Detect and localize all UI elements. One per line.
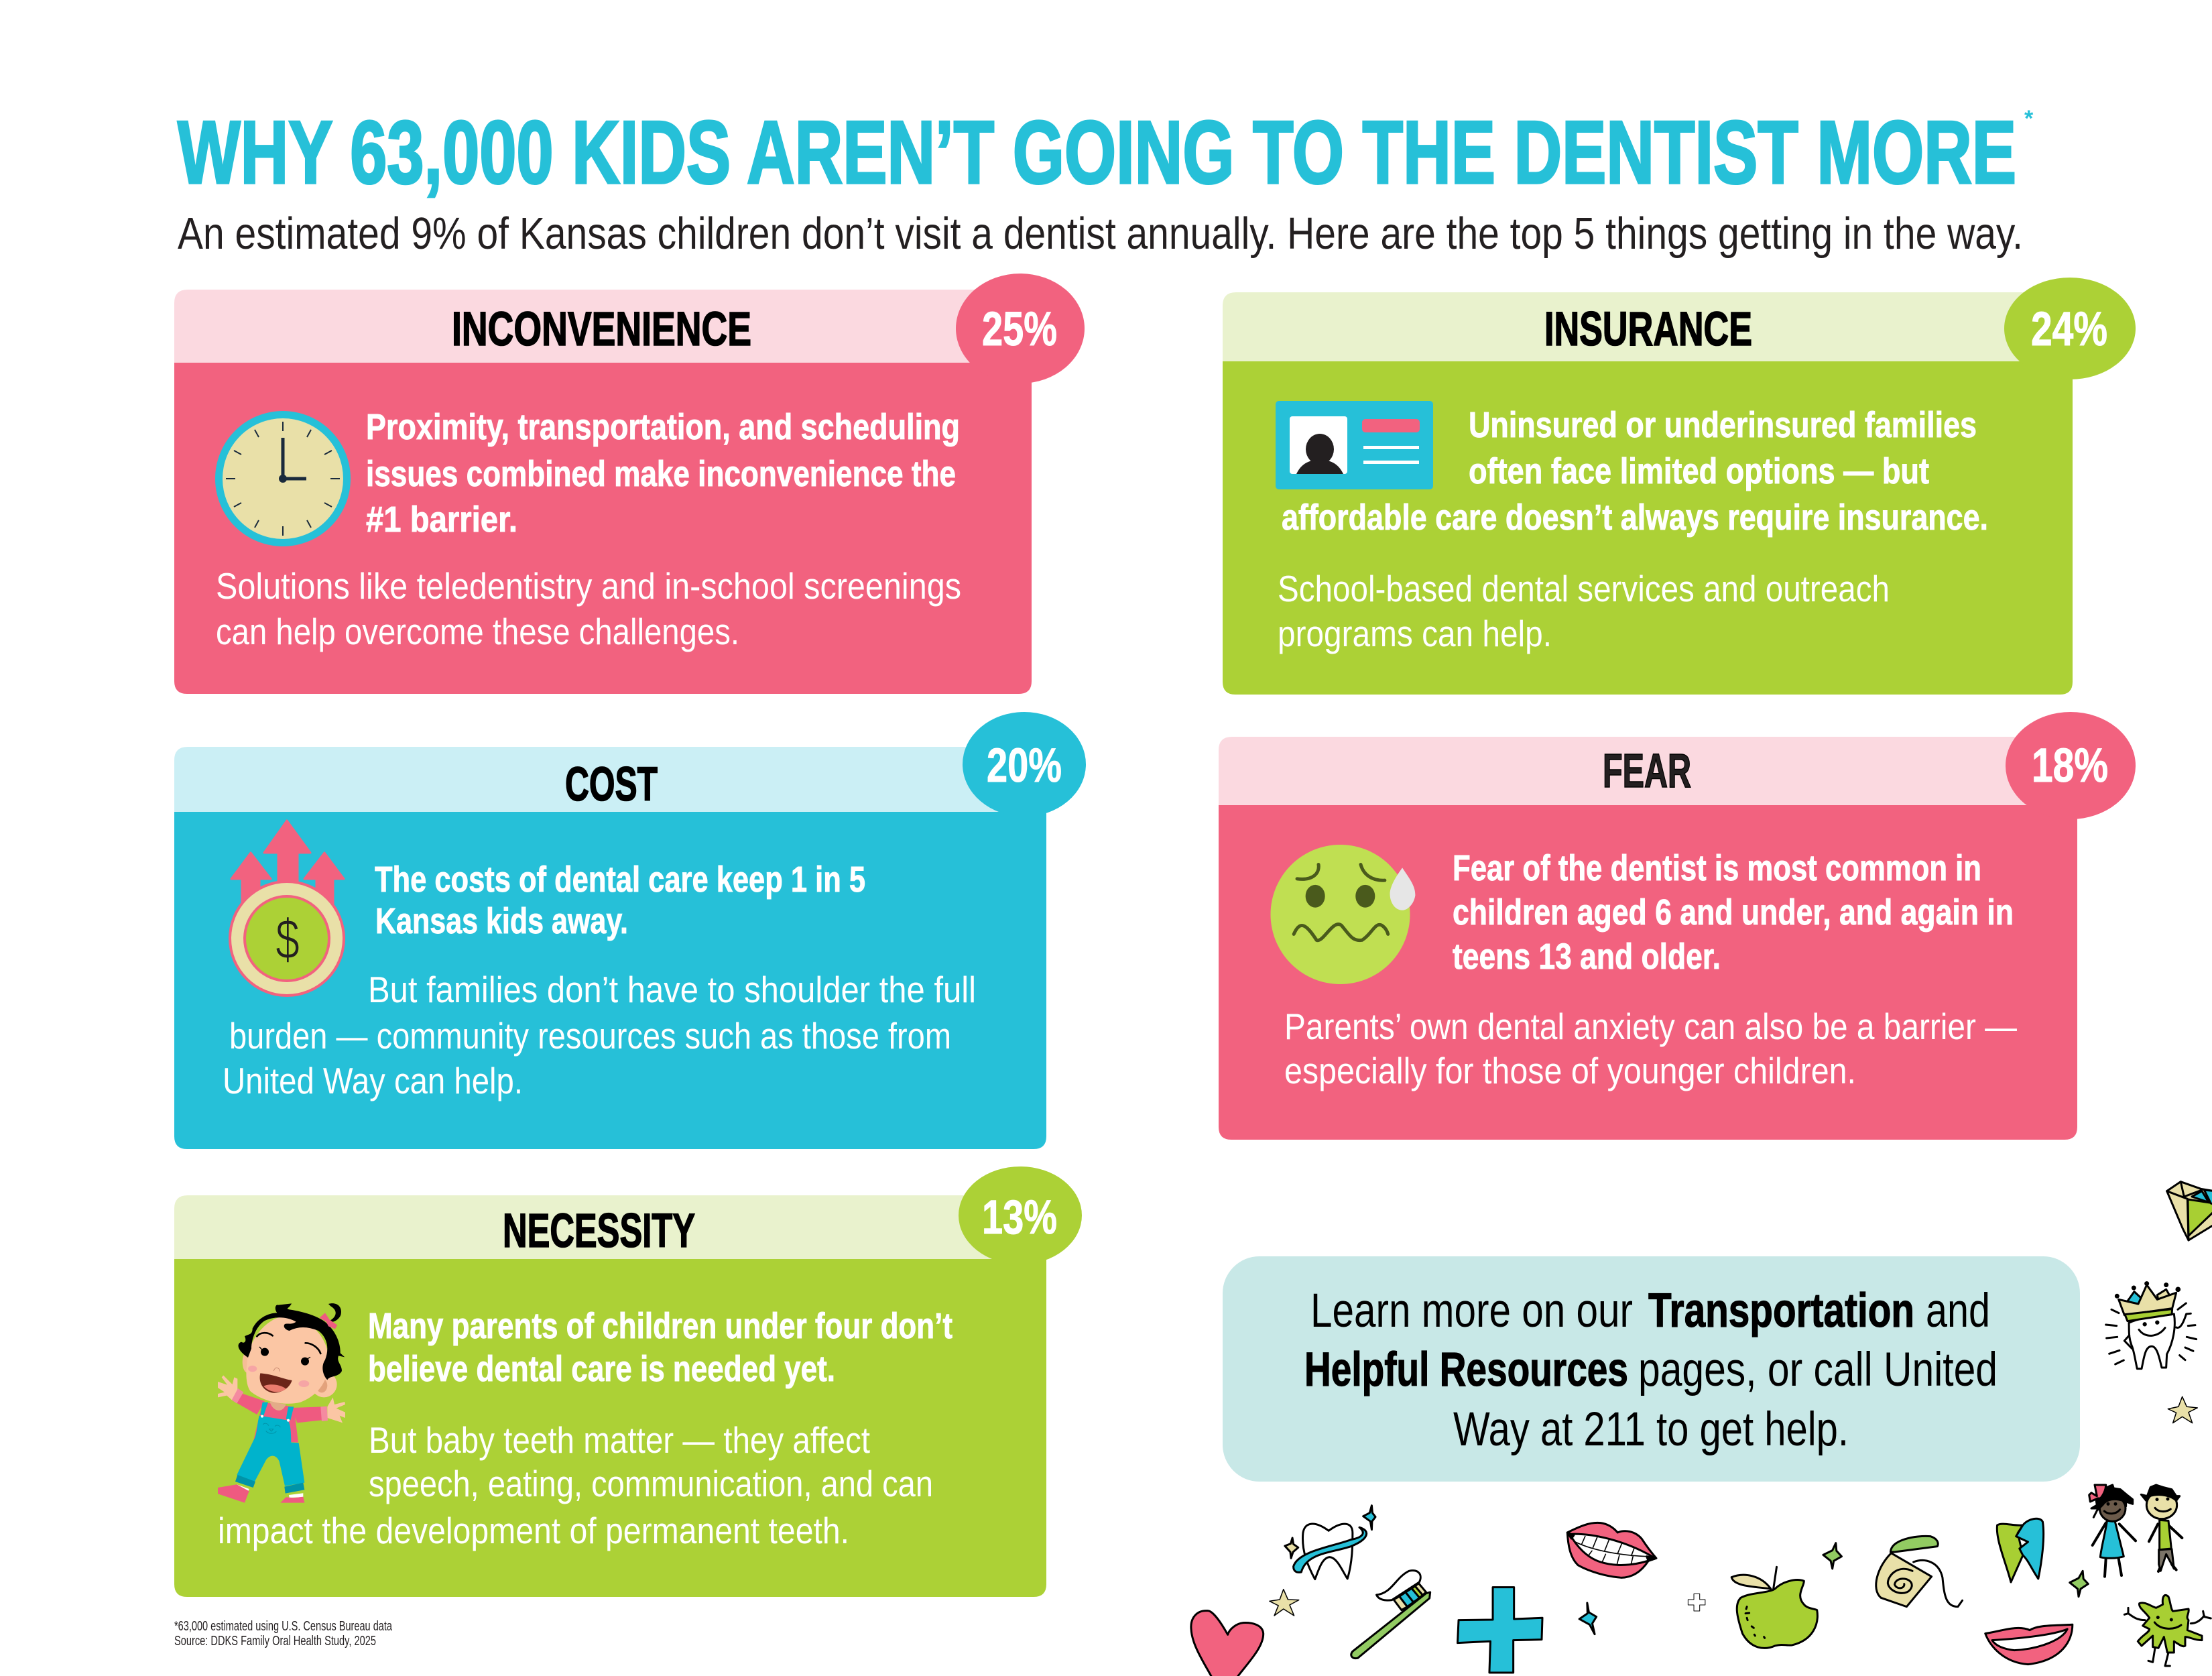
icon: children and germ doodles <box>2089 1485 2211 1666</box>
body text: School-based dental services and outreach <box>1278 568 1890 609</box>
body text: especially for those of younger children. <box>1284 1050 1856 1091</box>
panel: fear <box>1219 712 2136 1140</box>
icon: small plus <box>1688 1594 1705 1611</box>
bold text: Uninsured or underinsured families <box>1469 405 1977 445</box>
icon: diamond <box>2167 1182 2212 1240</box>
callout: learn more: Learn more on our <box>1310 1284 1633 1337</box>
body text: United Way can help. <box>223 1060 523 1101</box>
doodles: right side group <box>2106 1182 2212 1423</box>
body text <box>1278 568 1890 654</box>
bold text <box>368 1306 953 1389</box>
footnote <box>174 1619 393 1649</box>
heading: COST <box>565 758 658 811</box>
bold text: The costs of dental care keep 1 in 5 <box>375 859 865 900</box>
bold text <box>1453 848 2014 977</box>
panel: necessity <box>174 1166 1082 1597</box>
icon: toothbrush <box>1351 1571 1430 1659</box>
icon: medical plus <box>1457 1588 1542 1673</box>
doodles: bottom left group <box>1191 1506 1705 1676</box>
body text: programs can help. <box>1278 613 1552 654</box>
footnote: *63,000 estimated using U.S. Census Bureau data <box>174 1619 393 1634</box>
callout: learn more: Transportation <box>1648 1284 1914 1337</box>
body text <box>216 565 961 652</box>
icon: sparkle <box>1579 1603 1597 1634</box>
bold text: Many parents of children under four don’t <box>368 1306 953 1346</box>
icon: sparkle <box>2070 1571 2088 1597</box>
bold text: children aged 6 and under, and again in <box>1453 892 2014 933</box>
icon: toddler girl <box>218 1303 345 1503</box>
icon: sparkle <box>1823 1543 1841 1569</box>
icon: nervous face <box>1271 845 1415 984</box>
heading: INSURANCE <box>1544 303 1752 356</box>
callout: learn more: pages, or call United <box>1638 1343 1998 1396</box>
body text: burden — community resources such as those from <box>229 1015 951 1057</box>
icon: star <box>1270 1590 1299 1616</box>
percentage: 13% <box>982 1191 1057 1244</box>
bold text: teens 13 and older. <box>1453 937 1721 977</box>
icon: smiling lips <box>1567 1522 1656 1577</box>
body text: But families don’t have to shoulder the full <box>368 969 976 1010</box>
body text: speech, eating, communication, and can <box>369 1463 933 1504</box>
bold text: Kansas kids away. <box>375 901 628 941</box>
bold text: Fear of the dentist is most common in <box>1453 848 1981 888</box>
body text <box>218 1419 933 1551</box>
icon: clock <box>215 411 351 546</box>
bold text <box>375 859 865 941</box>
icon: apple <box>1731 1567 1817 1648</box>
bold text: often face limited options — but <box>1469 451 1929 491</box>
percentage: 20% <box>987 739 1062 792</box>
icon: star <box>2168 1396 2197 1423</box>
body text: Solutions like teledentistry and in-school screenings <box>216 565 961 607</box>
heading: NECESSITY <box>503 1205 695 1258</box>
callout: learn more: Helpful Resources <box>1304 1343 1628 1396</box>
icon: coin with arrows <box>229 821 345 997</box>
bold text: #1 barrier. <box>366 499 517 540</box>
icon: tooth with toothpaste <box>1285 1506 1375 1579</box>
body text: But baby teeth matter — they affect <box>369 1419 870 1461</box>
icon: heart <box>1191 1611 1264 1676</box>
icon: lips <box>1985 1624 2073 1665</box>
heading: INCONVENIENCE <box>452 303 751 356</box>
icon: crowned tooth <box>2106 1282 2197 1369</box>
percentage: 25% <box>982 303 1057 356</box>
bold text: believe dental care is needed yet. <box>368 1349 835 1389</box>
body text <box>223 969 976 1101</box>
panel: insurance <box>1223 278 2136 695</box>
percentage: 24% <box>2031 303 2107 356</box>
body text: Parents’ own dental anxiety can also be a barrier — <box>1284 1006 2017 1047</box>
icon: coin with arrows: $ <box>275 908 300 971</box>
icon: id card <box>1276 401 1433 489</box>
heading: FEAR <box>1603 745 1691 798</box>
icon: girl <box>2089 1485 2136 1577</box>
callout: learn more: and <box>1926 1284 1990 1337</box>
callout: learn more: Way at 211 to get help. <box>1453 1403 1849 1456</box>
percentage: 18% <box>2032 739 2108 792</box>
panel: cost <box>174 712 1086 1149</box>
body text <box>1284 1006 2017 1091</box>
footnote: Source: DDKS Family Oral Health Study, 2025 <box>174 1634 376 1649</box>
bold text <box>366 407 960 540</box>
body text: can help overcome these challenges. <box>216 611 739 652</box>
bold text: issues combined make inconvenience the <box>366 454 956 494</box>
bold text: affordable care doesn’t always require insurance. <box>1282 497 1988 538</box>
bold text: Proximity, transportation, and scheduling <box>366 407 960 447</box>
icon: two-tone tooth <box>1997 1518 2044 1582</box>
bold text <box>1282 405 1988 538</box>
callout: learn more <box>1223 1256 2080 1482</box>
icon: boy <box>2141 1485 2182 1571</box>
doodles: bottom right group <box>1731 1518 2088 1665</box>
icon: dental floss <box>1876 1536 1963 1607</box>
icon: germ <box>2124 1595 2211 1666</box>
panel: inconvenience <box>174 274 1085 694</box>
body text: impact the development of permanent teeth. <box>218 1510 849 1551</box>
title: * <box>2024 106 2034 131</box>
